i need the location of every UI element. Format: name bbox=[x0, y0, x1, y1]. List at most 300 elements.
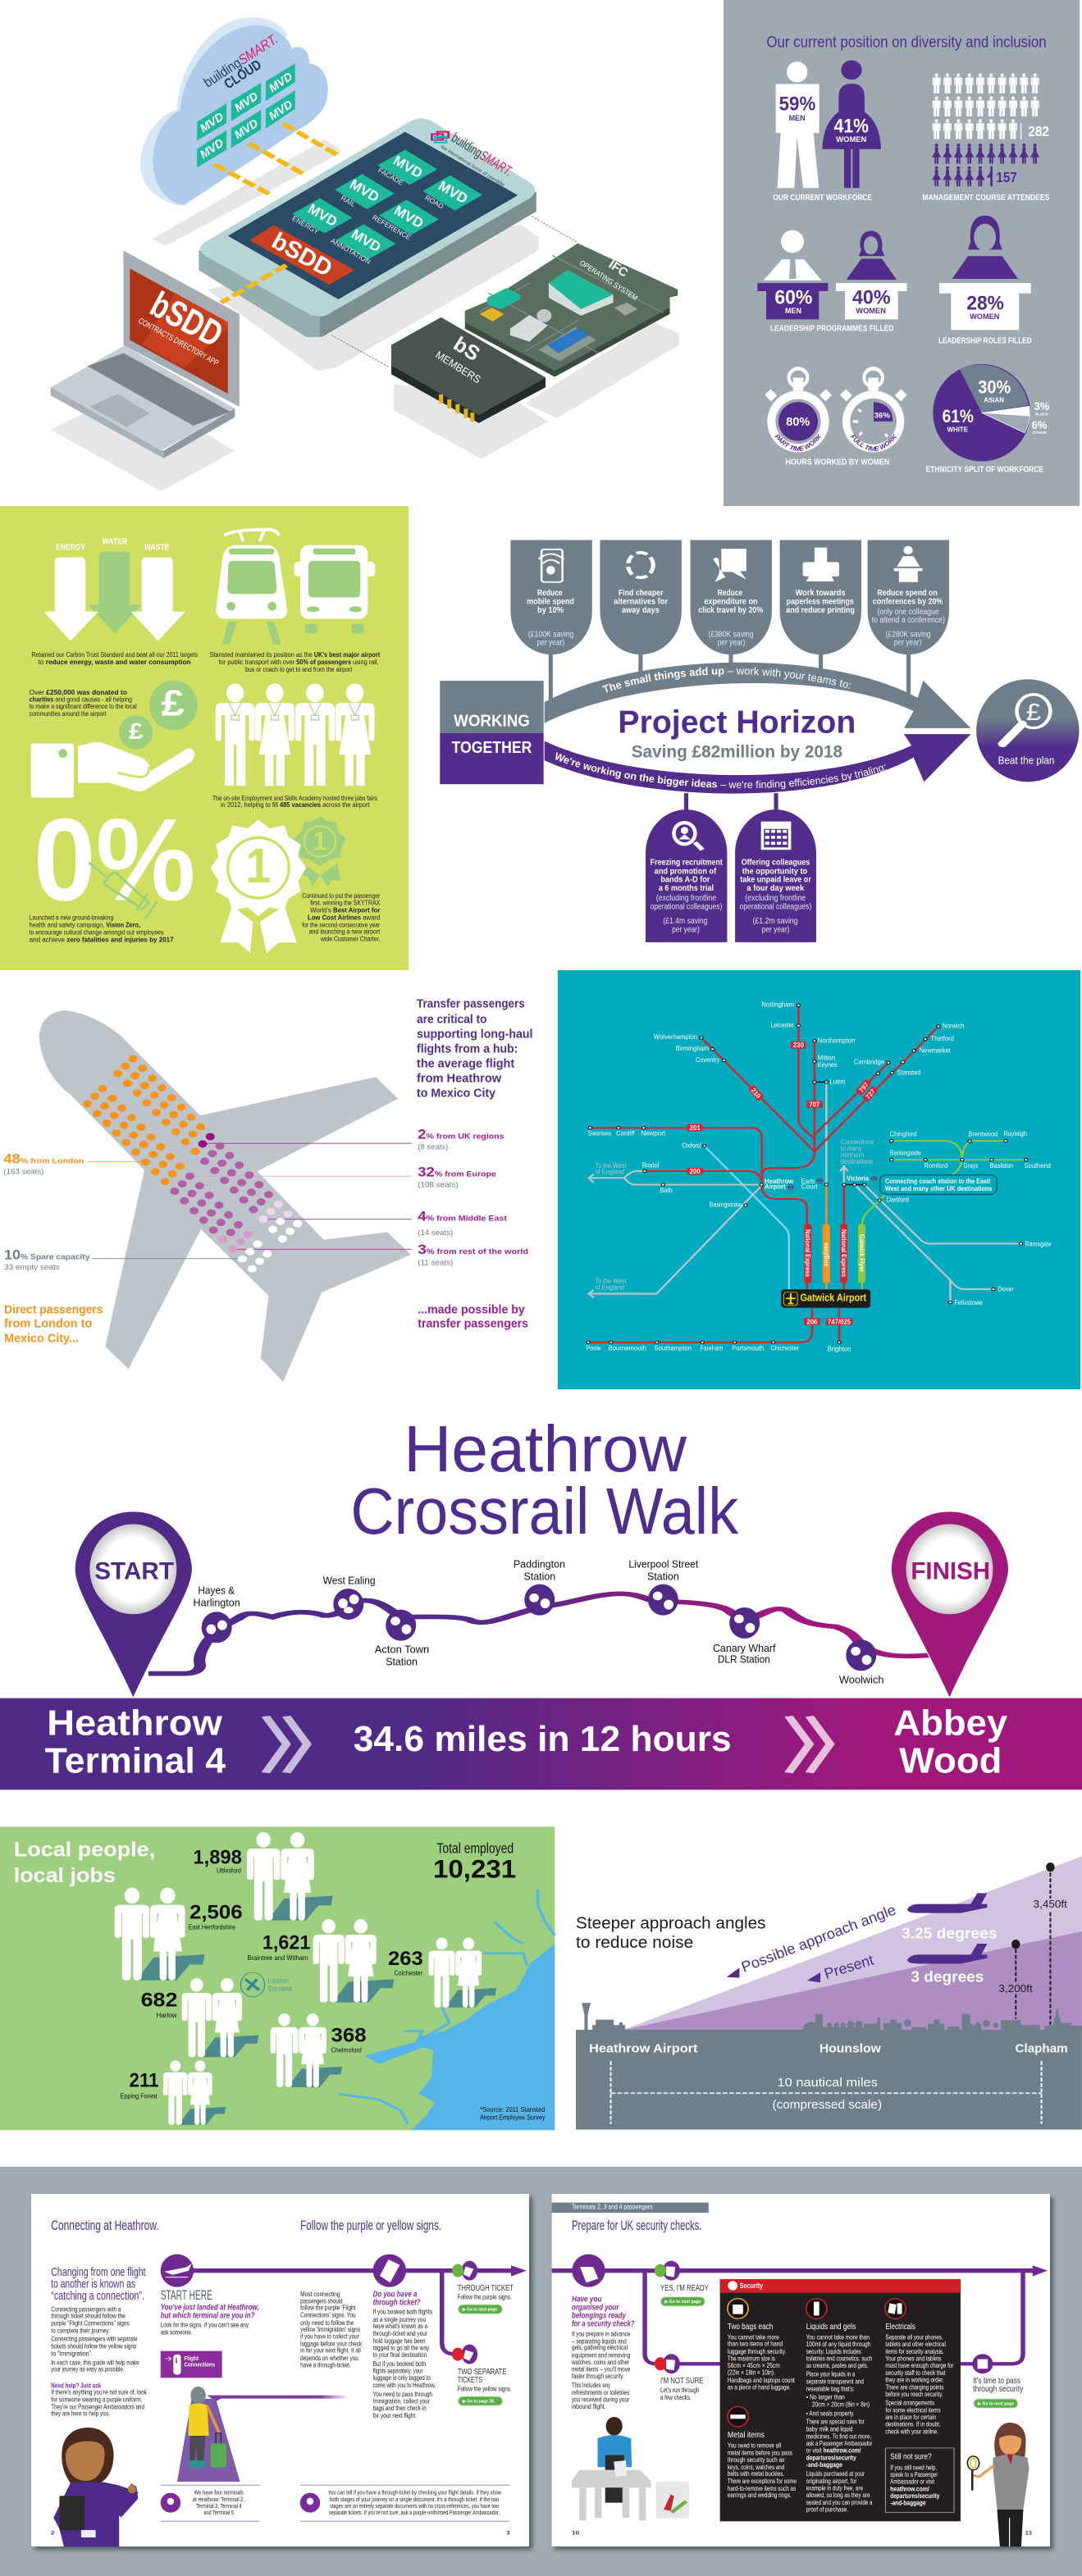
leadership roles bbox=[938, 216, 1032, 345]
caption: charities: charities and good causes - all helping bbox=[30, 695, 132, 704]
green land bbox=[0, 1826, 555, 2130]
bubble copy: per year) bbox=[762, 924, 789, 934]
top tips: separate tickets. If you're not sure, ask a purple-uniformed Passenger Ambassador. bbox=[329, 2509, 500, 2516]
security panel: departures/security bbox=[806, 2455, 856, 2461]
stopwatches bbox=[765, 368, 907, 467]
project horizon heading: Project Horizon bbox=[618, 704, 856, 741]
band text: Terminal 4 bbox=[45, 1741, 226, 1780]
footprint stops bbox=[202, 1584, 876, 1671]
panel: steeper approach angles bbox=[576, 1856, 1082, 2130]
intro copy: tickets should follow the yellow signs bbox=[51, 2342, 136, 2350]
direct passengers labels: Mexico City... bbox=[4, 1332, 79, 1345]
timeline bbox=[552, 2255, 1048, 2373]
intro copy: They're our Passenger Ambassadors and bbox=[51, 2403, 144, 2411]
station labels: West Ealing bbox=[323, 1575, 376, 1587]
curved arc captions bbox=[555, 668, 887, 789]
place names: Newmarket bbox=[920, 1046, 951, 1055]
total employed bbox=[433, 1841, 516, 1883]
place names: Felixstowe bbox=[954, 1299, 983, 1307]
start here copy: You've just landed at Heathrow, bbox=[161, 2304, 259, 2312]
isometric labels: bSDD bbox=[144, 285, 230, 355]
isometric labels: MVD bbox=[391, 203, 426, 231]
district numbers: 2,506 bbox=[189, 1901, 243, 1922]
ticket outcomes: TWO SEPARATE bbox=[458, 2368, 507, 2377]
icon: tram bbox=[216, 530, 287, 645]
through ticket copy: You need to pass through bbox=[373, 2391, 432, 2399]
bubble copy: the opportunity to bbox=[742, 865, 807, 876]
transfer passengers heading bbox=[417, 996, 532, 1100]
still not sure box: Still not sure? bbox=[890, 2453, 932, 2461]
bubble copy: a four day week bbox=[746, 882, 805, 892]
through ticket copy: come with you to Heathrow. bbox=[373, 2382, 436, 2390]
plane silhouette bbox=[39, 1010, 411, 1382]
transfer passengers heading: flights from a hub: bbox=[417, 1042, 518, 1055]
heading bbox=[576, 1913, 765, 1952]
panel: Heathrow Crossrail Walk: Woolwich bbox=[839, 1674, 884, 1685]
isometric labels: MVD bbox=[198, 136, 226, 161]
isometric labels: MVD bbox=[232, 89, 260, 114]
isometric labels: MVD bbox=[347, 176, 381, 205]
bubble copy: expenditure on bbox=[704, 596, 758, 606]
yes / not sure options: ▶ Go to next page bbox=[664, 2300, 701, 2305]
walk route line bbox=[148, 1593, 928, 1674]
curved arc captions: The small things add up – work with your teams to: bbox=[602, 668, 851, 692]
terminal tag: Terminals 2, 3 and 4 passengers bbox=[572, 2204, 653, 2211]
still not sure box: speak to a Passenger bbox=[890, 2471, 938, 2478]
panel: Heathrow Crossrail Walk: START bbox=[94, 1557, 174, 1584]
security panel: they are in working order. bbox=[885, 2377, 944, 2383]
laptop bbox=[51, 251, 240, 458]
icons in lower bubbles bbox=[672, 821, 791, 850]
page shadows bbox=[34, 2197, 1053, 2550]
caption: carbon trust: to reduce energy, waste and water consumption bbox=[39, 659, 191, 666]
ethnicity pie chart: WHITE bbox=[947, 426, 969, 434]
district numbers: 368 bbox=[331, 2024, 367, 2045]
teal background bbox=[558, 970, 1080, 1389]
distance scale bbox=[611, 2061, 1042, 2124]
leadership programmes bbox=[757, 230, 907, 333]
panel background bbox=[724, 0, 1080, 506]
leadership programmes: MEN bbox=[785, 306, 801, 315]
question copy: refreshments or toiletries bbox=[572, 2389, 629, 2397]
icon: coins and hand: £ bbox=[161, 683, 185, 724]
workforce figures: MEN bbox=[789, 113, 806, 122]
bubble copy: Reduce bbox=[718, 587, 742, 598]
question copy: inbound flight. bbox=[572, 2403, 606, 2411]
icon: award rosettes: 1 bbox=[313, 827, 326, 856]
people pairs bbox=[115, 1832, 496, 2125]
green routes bbox=[862, 1141, 1026, 1290]
security panel: are in place for certain bbox=[885, 2414, 936, 2421]
seat counts: (108 seats) bbox=[418, 1181, 459, 1189]
place names: Ramsgate bbox=[1025, 1240, 1052, 1248]
pass through security: through security bbox=[973, 2385, 1024, 2394]
caption: public transport: for public transport with over 50% of passengers using rail, bbox=[219, 659, 379, 666]
rotated route tags and operator names: 727 bbox=[864, 1087, 877, 1101]
bubble copy: Work towards bbox=[795, 587, 846, 598]
top tips: and Terminal 5 bbox=[203, 2509, 234, 2516]
headings bbox=[51, 2218, 441, 2303]
stopwatches: 36% bbox=[874, 411, 890, 420]
heading bbox=[14, 1838, 155, 1887]
top tips: at Heathrow: Terminal 2, bbox=[193, 2496, 244, 2503]
intro copy: your journey as easy as possible. bbox=[51, 2366, 125, 2373]
middle column copy: have a through-ticket. bbox=[300, 2362, 351, 2369]
bubble copy: and reduce printing bbox=[786, 604, 855, 615]
security panel: proof of purchase. bbox=[806, 2506, 848, 2513]
isometric labels: bS bbox=[450, 332, 484, 366]
security panel: Security bbox=[740, 2282, 763, 2291]
security panel: The maximum size is bbox=[728, 2355, 775, 2362]
middle column copy bbox=[300, 2291, 362, 2369]
bubble copy: conferences by 20% bbox=[873, 596, 943, 606]
workforce figures: 59% bbox=[779, 93, 815, 115]
security panel: Metal items bbox=[728, 2430, 765, 2440]
headings: Changing from one flight bbox=[51, 2266, 146, 2278]
place names: Nottingham bbox=[761, 1001, 794, 1009]
top tips: both stages of your journey on a single document, it's a through ticket. If the two bbox=[330, 2496, 499, 2503]
caption: jobs fairs: The on-site Employment and Skills Academy hosted three jobs fairs bbox=[212, 795, 377, 802]
place names: Romford bbox=[924, 1162, 947, 1170]
altitude markers: 3,450ft bbox=[1034, 1899, 1067, 1911]
intro copy: for someone wearing a purple uniform. bbox=[51, 2396, 142, 2404]
caption: charities bbox=[30, 689, 137, 718]
caption: public transport: bus or coach to get to and from the airport bbox=[245, 666, 353, 673]
bubble copy: take unpaid leave or bbox=[740, 874, 811, 884]
question copy: equipment and removing bbox=[572, 2351, 630, 2359]
intro copy bbox=[51, 2306, 147, 2418]
direct passengers labels: from London to bbox=[4, 1317, 92, 1330]
district numbers: 1,621 bbox=[263, 1931, 310, 1954]
bubble copy: Reduce bbox=[537, 587, 563, 598]
station labels: DLR Station bbox=[718, 1653, 770, 1665]
place names: Earls bbox=[801, 1178, 815, 1185]
station labels: Canary Wharf bbox=[713, 1643, 776, 1654]
place names: To the West bbox=[595, 1162, 627, 1170]
place names: Keynes bbox=[818, 1061, 838, 1069]
bubble copy: per year) bbox=[894, 637, 921, 647]
security panel: luggage through security. bbox=[728, 2348, 786, 2355]
location labels: Clapham bbox=[1016, 2042, 1068, 2055]
seat dots bbox=[87, 1059, 298, 1269]
still not sure box: If you still need help, bbox=[890, 2464, 937, 2471]
bubble copy: per year) bbox=[537, 637, 564, 647]
security officer bbox=[967, 2423, 1029, 2546]
curved stopwatch labels: PART TIME WORK bbox=[774, 433, 822, 451]
working together block bbox=[440, 681, 544, 784]
security panel: before you reach security. bbox=[885, 2391, 943, 2398]
station labels: Station bbox=[647, 1571, 679, 1583]
flight connections sign: Flight bbox=[184, 2355, 199, 2362]
isometric labels bbox=[137, 31, 639, 386]
stopwatches: 80% bbox=[786, 414, 810, 428]
question copy: organised your bbox=[572, 2304, 619, 2312]
caption: skytrax: Continued to put the passenger bbox=[302, 892, 381, 900]
rotated route tags and operator names bbox=[748, 1079, 879, 1277]
security panel: ask a Passenger Ambassador bbox=[806, 2440, 872, 2447]
through ticket copy: hold luggage has been bbox=[373, 2337, 426, 2346]
intro copy: purple “Flight Connections” signs bbox=[51, 2320, 130, 2328]
place names: destinations bbox=[841, 1158, 873, 1166]
caption: vision zero: to encourage cultural change amongst our employees bbox=[30, 928, 163, 937]
security panel: 20cm × 20cm (8in × 8in) bbox=[812, 2401, 870, 2408]
rotated route tags and operator names: 210 bbox=[750, 1087, 762, 1100]
isometric labels: MVD bbox=[436, 178, 470, 207]
bubble copy: per year) bbox=[672, 924, 700, 934]
district names: Uttlesford bbox=[217, 1867, 241, 1875]
question copy: gels, gathering electrical bbox=[572, 2344, 628, 2352]
seat counts: (8 seats) bbox=[418, 1142, 448, 1151]
security panel: baby milk and liquid bbox=[806, 2426, 852, 2432]
intro copy: Connecting passengers with separate bbox=[51, 2336, 138, 2343]
top tips: We have four terminals bbox=[194, 2489, 244, 2496]
caption: vision zero: Launched a new ground-breaking bbox=[30, 914, 113, 922]
panel: diversity and inclusion bbox=[724, 0, 1080, 506]
flight connections sign bbox=[161, 2351, 222, 2378]
icon: bus bbox=[294, 545, 375, 633]
through ticket copy: through ticket? bbox=[373, 2298, 421, 2307]
through ticket copy: as a single journey you bbox=[373, 2316, 426, 2324]
still not sure box: heathrow.com/ bbox=[890, 2485, 929, 2492]
ticket outcomes: TICKETS bbox=[458, 2376, 482, 2385]
security panel: You cannot take more than bbox=[806, 2334, 870, 2341]
bubble copy: operational colleagues) bbox=[651, 902, 722, 911]
security panel: 56cm × 45cm × 25cm bbox=[728, 2362, 780, 2369]
security panel: • No larger than bbox=[806, 2394, 845, 2400]
middle column copy: in for your next flight. It all bbox=[300, 2347, 361, 2355]
start here copy bbox=[161, 2304, 259, 2337]
security panel: There are special rules for bbox=[806, 2419, 865, 2425]
through ticket copy: If you booked both flights bbox=[373, 2309, 432, 2316]
bubble copy: (excluding frontline bbox=[656, 893, 716, 902]
place names: Thetford bbox=[930, 1035, 954, 1043]
bubble copy: click travel by 20% bbox=[698, 604, 764, 615]
degree labels: 3 degrees bbox=[911, 1969, 984, 1986]
panel: passenger guide spreads bbox=[0, 2167, 1082, 2576]
curved stopwatch labels: FULL TIME WORK bbox=[850, 433, 897, 451]
station labels: Acton Town bbox=[375, 1644, 429, 1656]
security panel: originating airport, for bbox=[806, 2478, 856, 2485]
management course pictogram: MANAGEMENT COURSE ATTENDEES bbox=[922, 193, 1049, 202]
terminal tag bbox=[552, 2203, 709, 2213]
isometric labels: MVD bbox=[305, 201, 340, 230]
bubble copy: a 6 months trial bbox=[659, 882, 714, 892]
distance scale: 10 nautical miles bbox=[778, 2076, 878, 2090]
spare capacity labels: 33 empty seats bbox=[4, 1263, 60, 1272]
caption: skytrax: and launching a new airport bbox=[309, 928, 381, 936]
place names: Norwich bbox=[942, 1022, 964, 1030]
place names: Barkingside bbox=[890, 1149, 921, 1157]
place names: Milton bbox=[818, 1054, 835, 1062]
security panel: check with your airline. bbox=[885, 2428, 938, 2435]
place names: Bournemouth bbox=[609, 1344, 646, 1352]
isometric shapes: cloud, phone, laptop, chips bbox=[51, 17, 679, 491]
security panel: • And seals properly. bbox=[806, 2410, 855, 2417]
heading: local jobs bbox=[14, 1864, 116, 1887]
transfer passenger breakdown: 3% from rest of the world bbox=[418, 1242, 528, 1257]
isometric labels: CLOUD bbox=[221, 57, 264, 92]
district names: Airport Employee Survey bbox=[480, 2113, 546, 2122]
yes / not sure options bbox=[660, 2284, 709, 2402]
bubble copy: per year) bbox=[718, 637, 745, 647]
start here copy: but which terminal are you in? bbox=[161, 2312, 255, 2320]
ticket outcomes: ▶ Go to next page bbox=[462, 2307, 497, 2312]
intro copy: Need help? Just ask bbox=[51, 2382, 102, 2390]
location labels: Hounslow bbox=[819, 2042, 881, 2055]
place names: Leicester bbox=[770, 1021, 794, 1029]
intro copy: Connecting passengers with a bbox=[51, 2306, 121, 2314]
seat counts: (14 seats) bbox=[418, 1229, 453, 1237]
white pages bbox=[31, 2194, 1050, 2546]
place names: Cambridge bbox=[854, 1058, 884, 1066]
page numbers bbox=[572, 2529, 1032, 2536]
caption: jobs fairs bbox=[212, 795, 377, 809]
place names: Victoria bbox=[847, 1174, 870, 1183]
traveller on purple path bbox=[177, 2387, 349, 2482]
flight connections sign: Connections bbox=[184, 2360, 215, 2368]
bubble copy: to attend a conference) bbox=[872, 615, 945, 625]
caption: skytrax: for the second consecutive year bbox=[302, 921, 381, 928]
place names: Court bbox=[801, 1183, 818, 1191]
bubble copy: Reduce spend on bbox=[877, 587, 938, 598]
isometric labels: CONTRACTS DIRECTORY APP bbox=[137, 317, 220, 368]
phone bbox=[199, 118, 536, 337]
through ticket copy: through-ticket and your bbox=[373, 2330, 427, 2338]
yes / not sure options: YES, I'M READY bbox=[660, 2284, 709, 2293]
gatwick airport box: Gatwick Airport bbox=[800, 1293, 866, 1304]
security panel: You cannot take more bbox=[728, 2334, 779, 2341]
middle column copy: only need to follow the bbox=[300, 2319, 354, 2328]
cloud bbox=[140, 17, 328, 206]
security panel: -and-baggage bbox=[806, 2461, 842, 2469]
beat the plan circle bbox=[976, 679, 1079, 782]
still not sure box: Ambassador or visit bbox=[890, 2478, 934, 2485]
district numbers: 682 bbox=[141, 1989, 177, 2011]
caption: skytrax: World's Best Airport for bbox=[310, 906, 380, 914]
question copy: This includes any bbox=[572, 2382, 610, 2390]
leadership programmes: 40% bbox=[852, 286, 891, 308]
bubble copy: (only one colleague bbox=[877, 607, 939, 616]
middle column copy: follow the purple 'Flight bbox=[300, 2305, 356, 2312]
security panel: Special arrangements bbox=[885, 2400, 934, 2406]
top tips: You can tell if you have a through-ticket by checking your flight details. If they show bbox=[328, 2489, 502, 2496]
page numbers: 11 bbox=[1025, 2529, 1032, 2536]
red routes bbox=[588, 1005, 938, 1343]
heading: Local people, bbox=[14, 1838, 155, 1861]
bubble copy: and promotion of bbox=[655, 865, 717, 876]
bubble copy: (excluding frontline bbox=[745, 893, 806, 902]
ticket outcomes bbox=[458, 2284, 514, 2405]
caption: vision zero bbox=[30, 914, 174, 944]
spare capacity labels: 10% Spare capacity bbox=[4, 1247, 89, 1262]
bubble copy: (£280K saving bbox=[886, 629, 931, 639]
heading: Prepare for UK security checks. bbox=[572, 2218, 701, 2233]
question copy: metal items – you'll move bbox=[572, 2365, 630, 2373]
down arrows bbox=[43, 537, 185, 641]
isometric labels: IFC bbox=[606, 258, 630, 280]
caption: carbon trust bbox=[31, 651, 198, 666]
place names: Fareham bbox=[700, 1344, 724, 1352]
security panel: belts with metal buckles. bbox=[728, 2470, 784, 2478]
bubble copy: alternatives for bbox=[614, 596, 668, 606]
route number labels: 201 bbox=[690, 1124, 701, 1132]
rotated route tags and operator names: National Express bbox=[804, 1229, 811, 1277]
ethnicity pie chart: ETHNICITY SPLIT OF WORKFORCE bbox=[926, 465, 1043, 474]
place names: Wolverhampton bbox=[654, 1033, 697, 1041]
district numbers: 211 bbox=[130, 2069, 159, 2090]
degree labels: 3.25 degrees bbox=[902, 1926, 997, 1942]
security panel: as creams, pastes and gels. bbox=[806, 2362, 868, 2369]
security panel: metal items before you pass bbox=[728, 2449, 792, 2456]
isometric labels: REFERENCE bbox=[371, 213, 413, 242]
security panel: tablets and other electrical bbox=[885, 2341, 946, 2348]
planes bbox=[727, 1893, 987, 1982]
project horizon heading bbox=[618, 704, 856, 761]
caption: charities: to make a significant difference to the local bbox=[30, 703, 137, 710]
workforce figures: OUR CURRENT WORKFORCE bbox=[773, 193, 872, 202]
security panel: Electricals bbox=[885, 2322, 915, 2332]
isometric labels: RAIL bbox=[340, 194, 357, 208]
ticket outcomes: ▶ Go to page 28 bbox=[462, 2399, 494, 2404]
security panel: separate transparent and bbox=[806, 2378, 864, 2385]
question copy: Have you bbox=[572, 2296, 602, 2304]
intro copy: through ticket should follow the bbox=[51, 2313, 126, 2320]
through ticket copy: tagged to go all the way bbox=[373, 2344, 429, 2352]
icons in upper bubbles bbox=[539, 549, 746, 582]
bubble copy: bands A-D for bbox=[660, 874, 710, 884]
page numbers: 3 bbox=[506, 2529, 510, 2536]
headings: START HERE bbox=[161, 2288, 212, 2303]
isometric labels: MEMBERS bbox=[433, 349, 483, 386]
leadership programmes: LEADERSHIP PROGRAMMES FILLED bbox=[770, 324, 894, 333]
security panel: destinations. If in doubt, bbox=[885, 2421, 941, 2428]
leadership roles: WOMEN bbox=[970, 312, 999, 321]
working together block: WORKING bbox=[454, 712, 530, 730]
bubble copy: away days bbox=[622, 604, 660, 615]
angled approach labels: Present bbox=[822, 1952, 875, 1982]
place names: Oxford bbox=[682, 1142, 701, 1150]
security panel: There are exceptions for some bbox=[728, 2478, 797, 2485]
panel: Project Horizon bbox=[440, 540, 1080, 942]
station labels bbox=[194, 1558, 884, 1685]
ticket outcomes: Follow the yellow signs. bbox=[458, 2386, 512, 2393]
place names: Brentwood bbox=[968, 1130, 998, 1138]
security panel: Liquids and gels bbox=[806, 2322, 856, 2332]
district names: Epping Forest bbox=[121, 2092, 158, 2100]
seat counts bbox=[418, 1142, 459, 1267]
heading: Steeper approach angles bbox=[576, 1913, 765, 1932]
isometric labels: MVD bbox=[198, 110, 226, 134]
place names: Chichester bbox=[770, 1344, 799, 1352]
security panel: must have enough charge for bbox=[885, 2362, 954, 2369]
isometric labels: MVD bbox=[349, 226, 383, 255]
grey and blue routes bbox=[589, 1082, 1020, 1302]
stations bbox=[588, 1005, 1026, 1343]
bubble copy: (£100K saving bbox=[528, 629, 573, 639]
place names: Heathrow bbox=[765, 1178, 794, 1185]
place names: Coventry bbox=[696, 1056, 720, 1065]
place names: Birmingham bbox=[676, 1045, 709, 1053]
security panel: (22in × 18in × 10in). bbox=[728, 2369, 775, 2376]
through ticket copy: But if you booked both bbox=[373, 2360, 426, 2369]
question copy: you received during your bbox=[572, 2396, 629, 2404]
transfer passenger breakdown bbox=[418, 1126, 528, 1330]
leadership programmes: WOMEN bbox=[856, 306, 886, 315]
distance scale: (compressed scale) bbox=[772, 2098, 882, 2112]
connecting coach station callout: Connecting coach station to the East/ bbox=[885, 1178, 991, 1186]
isometric labels: MVD bbox=[267, 98, 294, 122]
through ticket copy: Do you have a bbox=[373, 2290, 417, 2299]
